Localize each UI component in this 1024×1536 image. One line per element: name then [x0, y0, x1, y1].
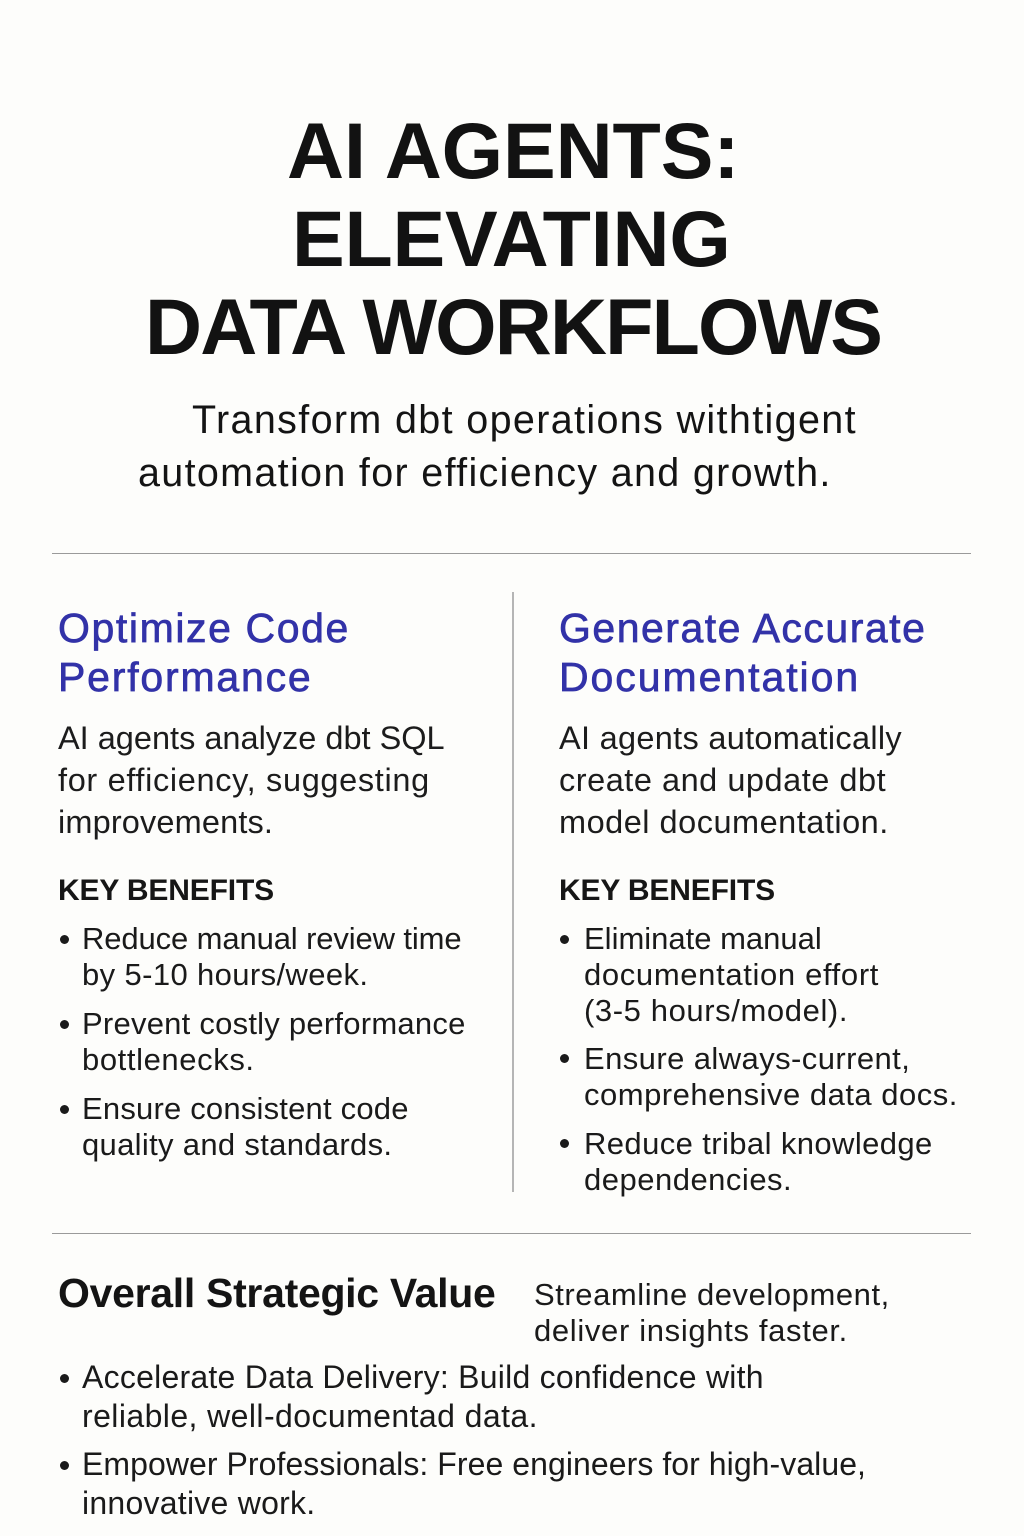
benefit list: by 5-10 hours/week.: [82, 957, 368, 992]
benefit list: dependencies.: [584, 1162, 792, 1197]
heading: overall strategic value: Overall Strategic Value: [58, 1270, 496, 1316]
heading: generate accurate documentation: Generate Accurate: [559, 605, 926, 651]
panel: overall strategic value: [58, 1270, 890, 1521]
heading: key benefits: KEY BENEFITS: [58, 874, 274, 907]
subtitle: Transform dbt operations withtigent: [192, 398, 857, 442]
text: description: model documentation.: [559, 804, 889, 840]
panel: optimize code performance: [58, 605, 466, 1162]
panel: generate accurate documentation: [559, 605, 958, 1197]
title: DATA WORKFLOWS: [145, 282, 881, 371]
benefit list: Ensure always-current,: [584, 1041, 910, 1076]
title: [145, 106, 881, 371]
title: ELEVATING: [292, 194, 731, 283]
strategic value list: Empower Professionals: Free engineers for high-value,: [82, 1446, 866, 1482]
benefit list: comprehensive data docs.: [584, 1077, 958, 1112]
benefit list: Reduce tribal knowledge: [584, 1126, 933, 1161]
benefit list: (3-5 hours/model).: [584, 993, 848, 1028]
heading: generate accurate documentation: Documentation: [559, 654, 860, 700]
subtitle: automation for efficiency and growth.: [138, 451, 832, 495]
benefit list: Prevent costly performance: [82, 1006, 466, 1041]
benefit list: Reduce manual review time: [82, 921, 462, 956]
subtitle: [138, 398, 857, 495]
text: strategic summary: deliver insights faster.: [534, 1313, 848, 1348]
text: description: [58, 720, 445, 840]
heading: key benefits: KEY BENEFITS: [559, 874, 775, 907]
benefit list: documentation effort: [584, 957, 879, 992]
title: AI AGENTS:: [287, 106, 740, 195]
heading: optimize code performance: [58, 605, 350, 700]
text: description: improvements.: [58, 804, 273, 840]
text: description: create and update dbt: [559, 762, 886, 798]
heading: optimize code performance: Optimize Code: [58, 605, 350, 651]
heading: generate accurate documentation: [559, 605, 926, 700]
benefit list: [560, 921, 958, 1197]
benefit list: Ensure consistent code: [82, 1091, 409, 1126]
strategic value list: [60, 1359, 866, 1521]
heading: optimize code performance: Performance: [58, 654, 313, 700]
benefit list: bottlenecks.: [82, 1042, 255, 1077]
text: strategic summary: [534, 1277, 890, 1348]
text: description: AI agents automatically: [559, 720, 902, 756]
benefit list: [60, 921, 466, 1162]
text: strategic summary: Streamline development,: [534, 1277, 890, 1312]
text: description: AI agents analyze dbt SQL: [58, 720, 445, 756]
strategic value list: innovative work.: [82, 1485, 315, 1521]
text: description: for efficiency, suggesting: [58, 762, 430, 798]
text: description: [559, 720, 902, 840]
benefit list: quality and standards.: [82, 1127, 392, 1162]
strategic value list: reliable, well-documentad data.: [82, 1398, 538, 1434]
benefit list: Eliminate manual: [584, 921, 822, 956]
strategic value list: Accelerate Data Delivery: Build confidence with: [82, 1359, 764, 1395]
